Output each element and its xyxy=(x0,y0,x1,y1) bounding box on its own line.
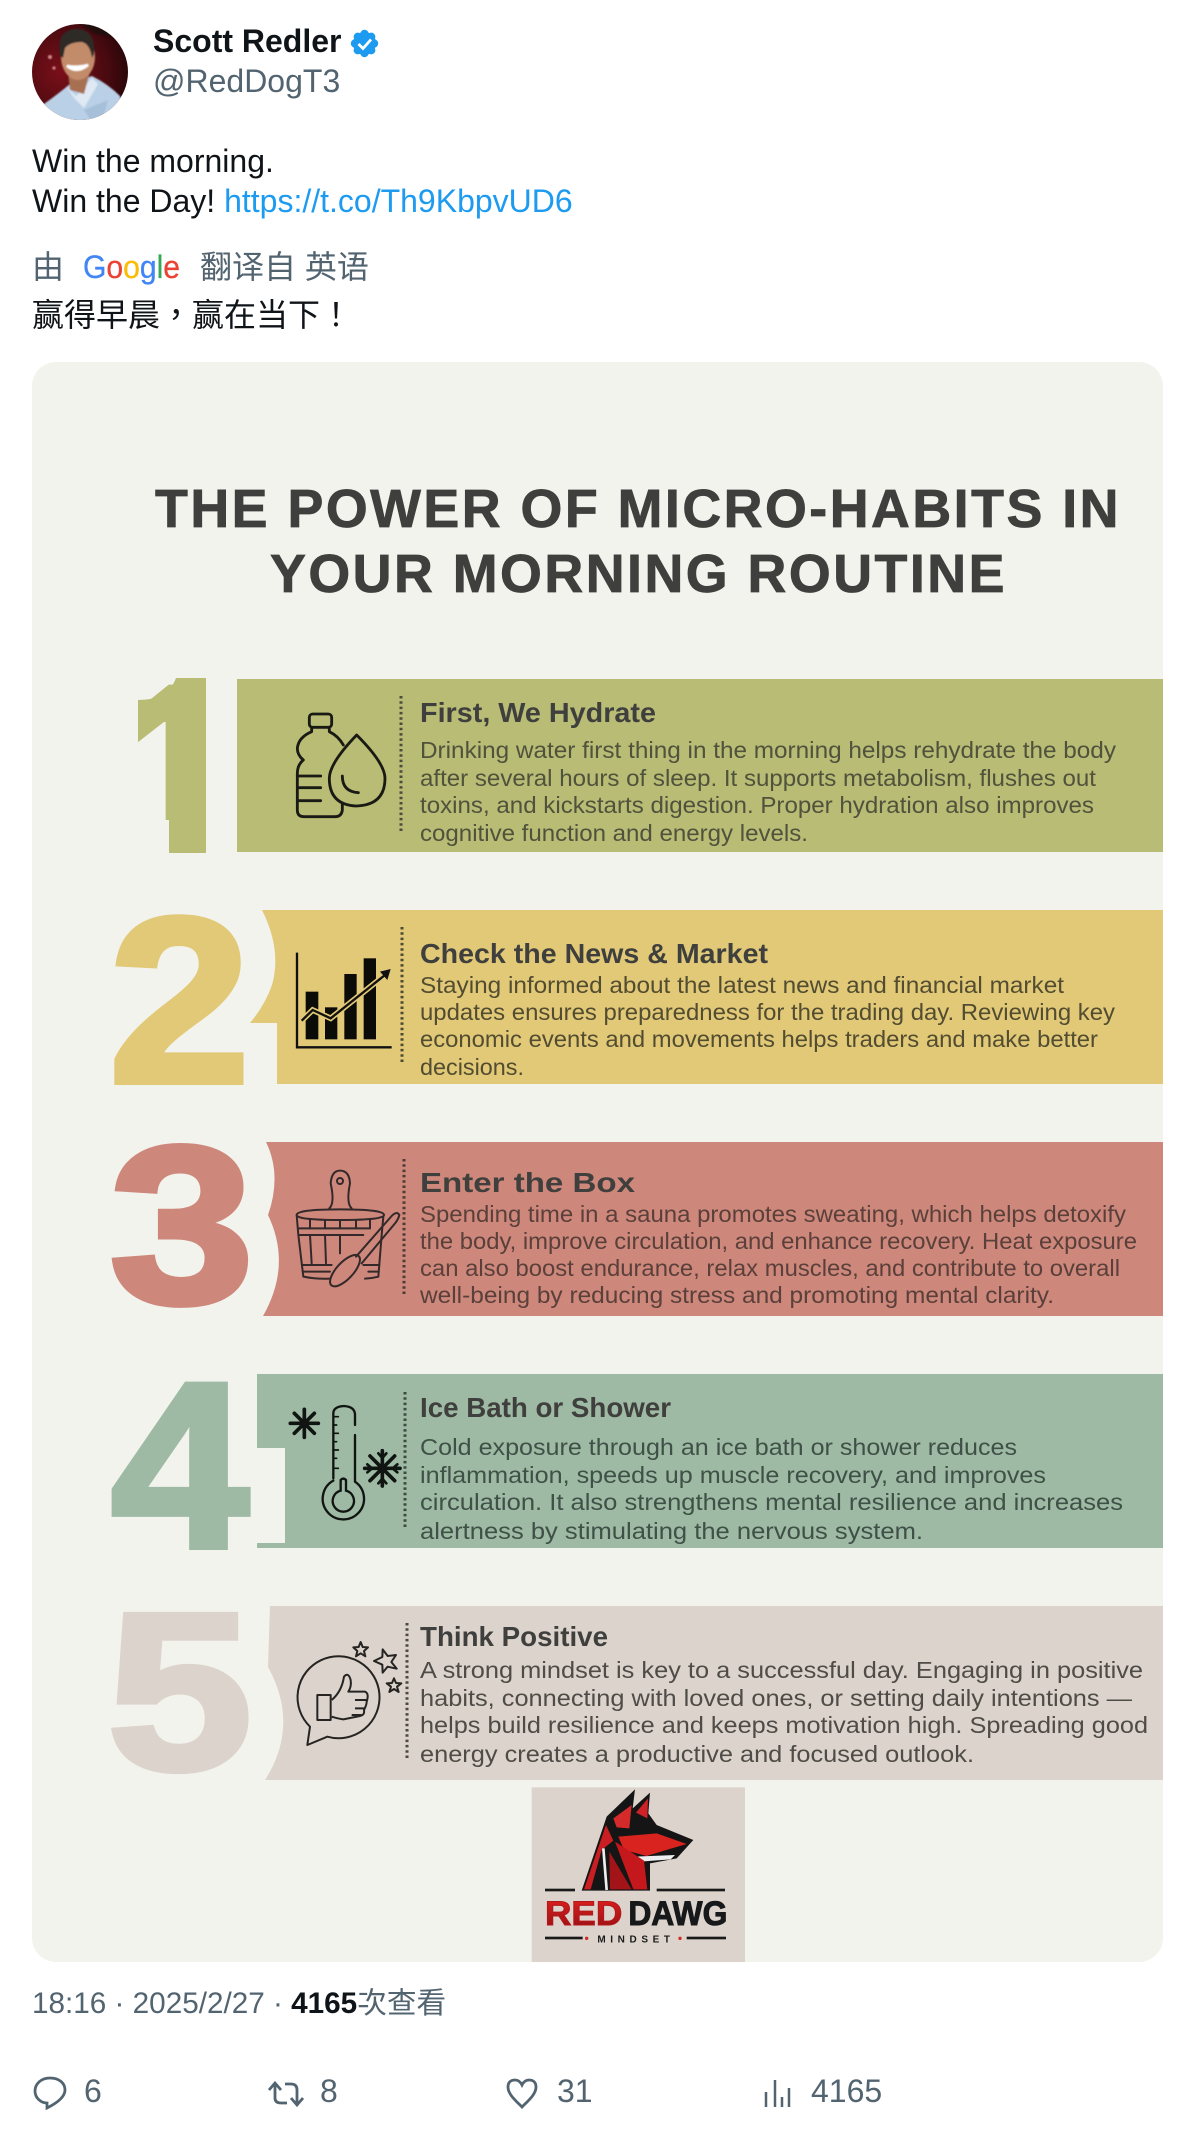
author name: Scott Redler xyxy=(153,23,341,59)
stat: replies: 6 xyxy=(84,2073,102,2109)
heading: Think Positive xyxy=(420,1621,608,1652)
heading: Check the News & Market xyxy=(420,938,768,969)
icon: sauna bucket and ladle xyxy=(297,1171,399,1291)
numeral 2: 2 xyxy=(109,870,250,1133)
translation attribution xyxy=(32,249,369,285)
band xyxy=(265,1606,1163,1780)
body text: Drinking water first thing in the morning helps rehydrate the body xyxy=(420,737,1117,763)
timestamp and view count: 18:16 · 2025/2/27 · 4165次查看 xyxy=(32,1987,446,2020)
body text: habits, connecting with loved ones, or setting daily intentions — xyxy=(420,1685,1132,1711)
icon: bottle and drop xyxy=(297,714,385,817)
wordmark: RED xyxy=(545,1895,622,1933)
tweet text: Win the Day! https://t.co/Th9KbpvUD6 xyxy=(32,183,573,219)
panel: step 2 news and market xyxy=(109,870,1163,1133)
body text: inflammation, speeds up muscle recovery, and improves xyxy=(420,1462,1046,1488)
body text: circulation. It also strengthens mental resilience and increases xyxy=(420,1489,1123,1515)
body text: A strong mindset is key to a successful day. Engaging in positive xyxy=(420,1657,1143,1683)
body text: helps build resilience and keeps motivation high. Spreading good xyxy=(420,1712,1148,1738)
heading: First, We Hydrate xyxy=(420,697,656,728)
tweet text: Win the morning. xyxy=(32,143,274,179)
tagline: MINDSET xyxy=(597,1935,670,1946)
panel: step 5 think positive xyxy=(111,1606,1163,1780)
body text: the body, improve circulation, and enhance recovery. Heat exposure xyxy=(420,1228,1137,1254)
translation attribution: 由 xyxy=(32,249,64,285)
icon: thumbs up speech bubble with stars xyxy=(298,1642,401,1745)
panel: step 1 hydrate xyxy=(110,638,1163,901)
body text: after several hours of sleep. It supports metabolism, flushes out xyxy=(420,765,1097,791)
band xyxy=(257,1374,1163,1548)
stat: views: 4165 xyxy=(811,2073,882,2109)
icon: bar chart with arrow xyxy=(297,953,392,1047)
icon: thermometer with snowflakes xyxy=(290,1406,400,1519)
band xyxy=(263,1142,1163,1316)
stat: replies xyxy=(35,2073,102,2109)
stat: retweets xyxy=(269,2073,338,2109)
numeral 4: 4 xyxy=(111,1334,249,1598)
body text: cognitive function and energy levels. xyxy=(420,820,808,846)
stat: likes: 31 xyxy=(557,2073,593,2109)
translation attribution: Google xyxy=(83,249,180,285)
author handle: @RedDogT3 xyxy=(153,63,340,99)
body text xyxy=(420,1434,1123,1544)
body text: alertness by stimulating the nervous system. xyxy=(420,1518,923,1544)
stat: retweets: 8 xyxy=(320,2073,338,2109)
panel: step 3 sauna xyxy=(110,1100,1163,1350)
body text: economic events and movements helps traders and make better xyxy=(420,1026,1098,1052)
body text: Spending time in a sauna promotes sweating, which helps detoxify xyxy=(420,1201,1127,1227)
body text xyxy=(419,1201,1137,1308)
band xyxy=(237,679,1163,852)
title: YOUR MORNING ROUTINE xyxy=(270,544,1007,604)
body text: Cold exposure through an ice bath or shower reduces xyxy=(420,1434,1017,1460)
body text: updates ensures preparedness for the trading day. Reviewing key xyxy=(420,999,1116,1025)
body text xyxy=(420,737,1117,846)
translation attribution: 翻译自 英语 xyxy=(200,249,369,285)
panel: step 4 ice bath xyxy=(111,1334,1163,1598)
numeral 1: 1 xyxy=(124,638,229,901)
infographic card xyxy=(32,362,1163,1962)
tweet text xyxy=(32,143,573,219)
numeral 3: 3 xyxy=(110,1100,254,1350)
icon: verified badge xyxy=(351,30,378,57)
stat: likes xyxy=(508,2073,593,2109)
body text xyxy=(420,972,1116,1080)
band xyxy=(250,910,1163,1084)
icon: wolf head xyxy=(582,1789,693,1891)
body text: Staying informed about the latest news and financial market xyxy=(420,972,1065,998)
body text: well-being by reducing stress and promoting mental clarity. xyxy=(419,1282,1054,1308)
body text: can also boost endurance, relax muscles, and contribute to overall xyxy=(420,1255,1120,1281)
avatar xyxy=(32,24,128,122)
heading: Enter the Box xyxy=(420,1167,636,1198)
body text: energy creates a productive and focused outlook. xyxy=(420,1741,974,1767)
logo: Red Dawg Mindset: DAWG xyxy=(628,1895,727,1933)
translated tweet text: 赢得早晨，赢在当下！ xyxy=(32,297,352,333)
numeral 5: 5 xyxy=(107,1567,252,1817)
title xyxy=(155,489,1116,593)
logo: Red Dawg Mindset xyxy=(532,1787,745,1962)
body text: decisions. xyxy=(420,1054,524,1080)
heading: Ice Bath or Shower xyxy=(420,1392,671,1423)
body text xyxy=(420,1657,1148,1767)
title: THE POWER OF MICRO-HABITS IN xyxy=(155,479,1121,539)
stat: views xyxy=(766,2073,882,2109)
body text: toxins, and kickstarts digestion. Proper hydration also improves xyxy=(420,792,1094,818)
